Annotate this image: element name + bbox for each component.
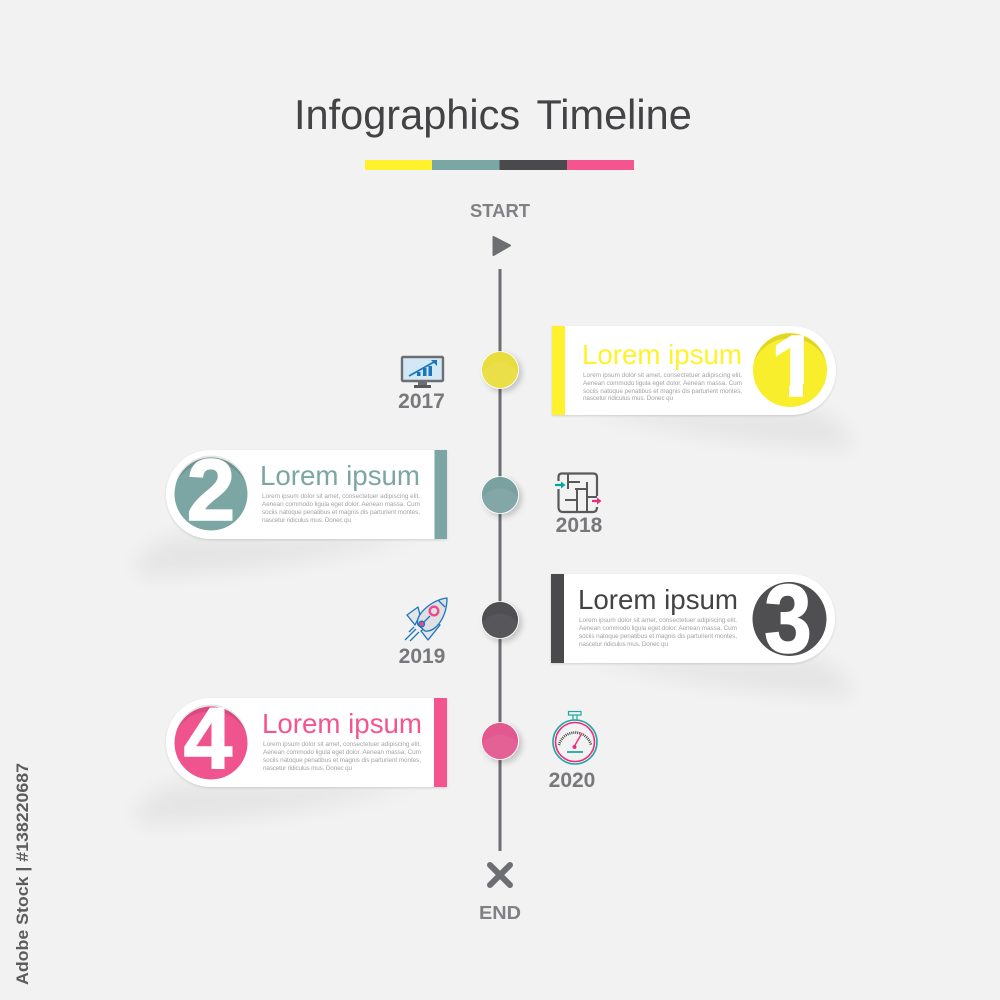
card 1 body text: Aenean commodo ligula eget dolor. Aenean massa. Cum <box>583 380 742 387</box>
card 2 body text <box>262 493 420 524</box>
stock credit vertical text: Adobe Stock | #138220687 <box>13 763 32 985</box>
icon: monitor with chart <box>402 357 443 388</box>
card 1 heading: Lorem ipsum <box>582 339 742 370</box>
card 2 body text: Lorem ipsum dolor sit amet, consectetuer adipiscing elit. <box>262 493 420 500</box>
colour bar <box>365 160 634 170</box>
timeline node 2018 <box>482 476 518 515</box>
number badge 4 <box>174 690 248 787</box>
card 3 body text: Lorem ipsum dolor sit amet, consectetuer adipiscing elit. <box>579 617 737 624</box>
card 1 body text: Lorem ipsum dolor sit amet, consectetuer adipiscing elit. <box>583 372 742 379</box>
icon: rocket <box>405 598 447 641</box>
icon: start play triangle <box>494 237 510 255</box>
card 1 body text: sociis natoque penatibus et magnis dis parturient montes, <box>583 388 742 395</box>
timeline vertical line <box>498 269 502 851</box>
icon: maze <box>555 474 602 512</box>
timeline node 2019 <box>482 602 518 640</box>
card 4 body text: Lorem ipsum dolor sit amet, consectetuer adipiscing elit. <box>263 741 421 748</box>
card 2 heading: Lorem ipsum <box>260 460 420 491</box>
card 4 body text <box>263 741 421 772</box>
panel: card 4 <box>137 690 447 826</box>
card 4 body text: nascetur ridiculus mus. Donec qu <box>263 765 352 772</box>
start label: START <box>470 200 531 221</box>
card 3 body text: Aenean commodo ligula eget dolor. Aenean massa. Cum <box>579 625 737 632</box>
number badge 3 <box>752 565 826 673</box>
card 3 body text <box>579 617 737 648</box>
title: Timeline <box>536 91 692 138</box>
number badge 1 <box>753 333 827 407</box>
year 2020: 2020 <box>549 769 595 792</box>
card 3 heading: Lorem ipsum <box>578 584 738 615</box>
card 2 body text: Aenean commodo ligula eget dolor. Aenean massa. Cum <box>262 501 420 508</box>
number badge 1: 1 <box>771 318 819 415</box>
timeline node 2017 <box>482 352 518 390</box>
number badge 4: 4 <box>184 690 232 787</box>
title: Infographics <box>294 91 520 138</box>
card 1 body text <box>583 372 742 402</box>
card 4 heading: Lorem ipsum <box>262 708 422 739</box>
card 2 body text: nascetur ridiculus mus. Donec qu <box>262 517 351 524</box>
card 2 body text: sociis natoque penatibus et magnis dis parturient montes, <box>262 509 420 516</box>
timeline node 2020 <box>482 722 518 761</box>
panel: card 3 <box>551 565 855 698</box>
number badge 3: 3 <box>764 565 812 673</box>
card 4 body text: Aenean commodo ligula eget dolor. Aenean massa. Cum <box>263 749 421 756</box>
number badge 2: 2 <box>187 442 235 539</box>
year 2017: 2017 <box>398 390 445 413</box>
end label: END <box>479 902 521 923</box>
panel: card 2 <box>137 442 447 578</box>
year 2018: 2018 <box>556 514 603 537</box>
card 4 body text: sociis natoque penatibus et magnis dis parturient montes, <box>263 757 421 764</box>
card 1 body text: nascetur ridiculus mus. Donec qu <box>583 395 673 402</box>
icon: stopwatch <box>553 712 597 764</box>
panel: card 1 <box>551 326 839 444</box>
year 2019: 2019 <box>399 645 445 668</box>
card 3 body text: sociis natoque penatibus et magnis dis parturient montes, <box>579 633 737 640</box>
number badge 2 <box>174 442 248 539</box>
icon: end cross <box>490 865 510 885</box>
card 3 body text: nascetur ridiculus mus. Donec qu <box>579 641 668 648</box>
